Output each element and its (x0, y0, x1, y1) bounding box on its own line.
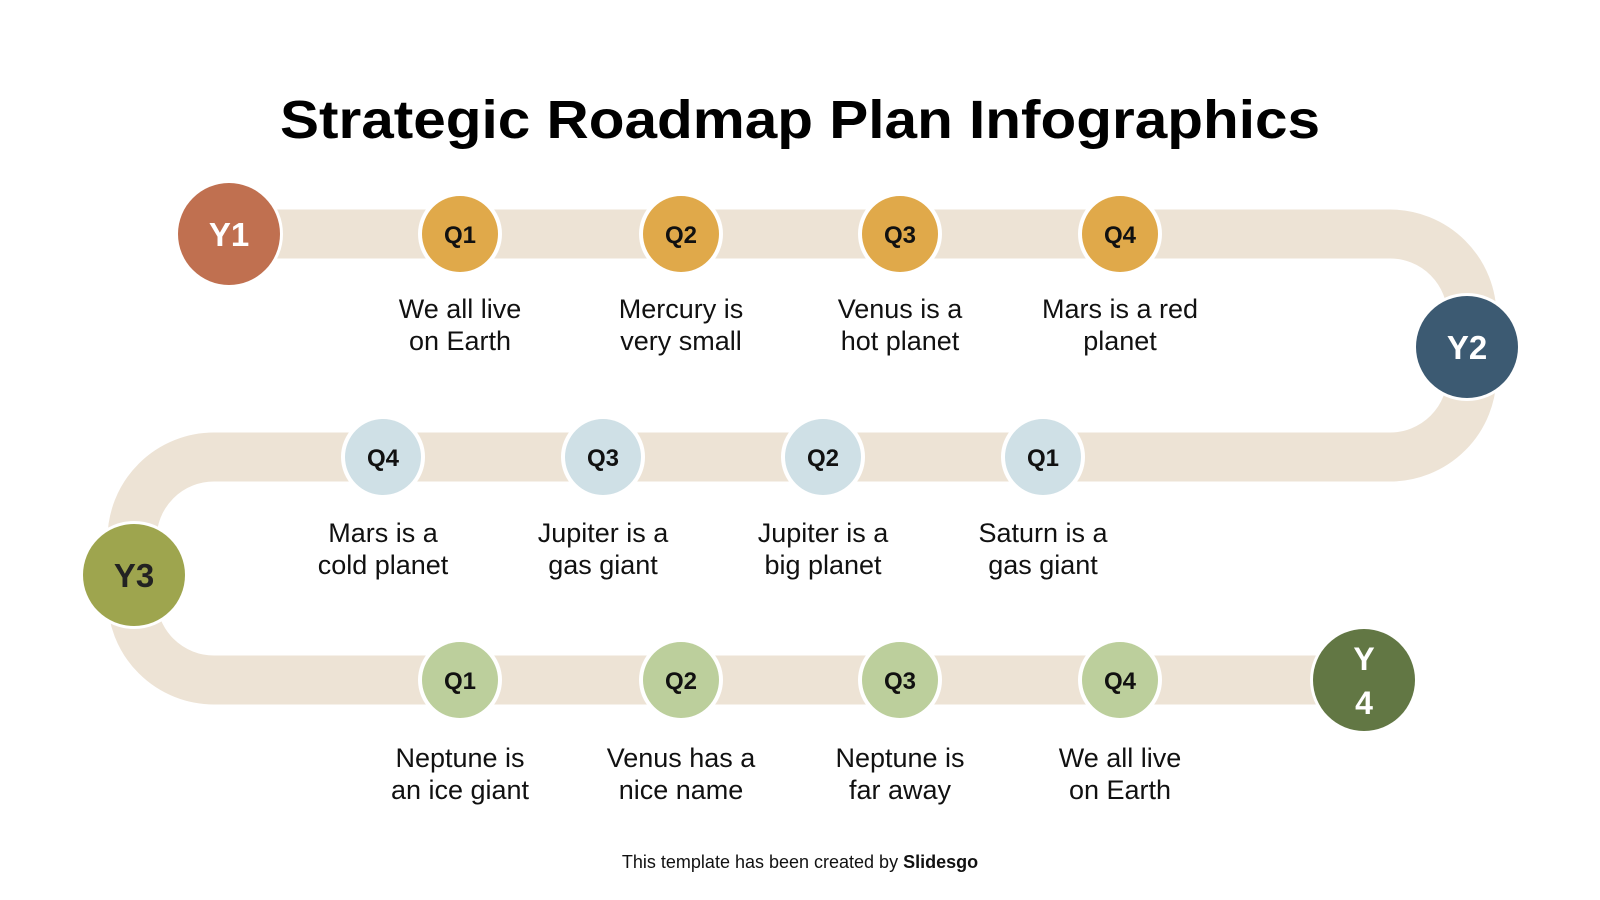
row 2 descriptions: Mars is a (328, 518, 439, 548)
Q4 row2: Q4 (367, 445, 400, 472)
row 1 descriptions: hot planet (841, 326, 960, 356)
row 2 descriptions: Jupiter is a (758, 518, 889, 548)
Q3 row2: Q3 (587, 445, 619, 472)
row 1 descriptions: Venus is a (838, 294, 963, 324)
row 1 quarters (418, 192, 1162, 276)
Q1 row2 (1001, 415, 1085, 499)
milestone: Y1 (175, 180, 283, 288)
milestone: Y1: Y1 (209, 216, 249, 253)
Q2 row1 (639, 192, 723, 276)
row 3 descriptions: nice name (619, 775, 743, 805)
Q1 row2: Q1 (1027, 445, 1059, 472)
row 3 descriptions (391, 743, 1181, 805)
milestone: Y4: Y (1353, 641, 1375, 677)
row 2 descriptions: Jupiter is a (538, 518, 669, 548)
row 3 descriptions: Neptune is (835, 743, 965, 773)
row 1 descriptions: We all live (399, 294, 521, 324)
Q2 row3: Q2 (665, 668, 697, 695)
row 2 descriptions: gas giant (988, 550, 1098, 580)
title: Strategic Roadmap Plan Infographics (280, 90, 1320, 150)
row 3 descriptions: on Earth (1069, 775, 1171, 805)
row 1 descriptions: Mars is a red (1042, 294, 1198, 324)
Q1 row3: Q1 (444, 668, 476, 695)
row 2 descriptions (318, 518, 1109, 580)
Q4 row1: Q4 (1104, 222, 1137, 249)
row 3 quarters (418, 638, 1162, 722)
milestone: Y4 (1310, 626, 1418, 734)
row 2 descriptions: Saturn is a (978, 518, 1109, 548)
Q3 row3 (858, 638, 942, 722)
Q1 row3 (418, 638, 502, 722)
Q2 row2 (781, 415, 865, 499)
row 1 descriptions: on Earth (409, 326, 511, 356)
Q2 row3 (639, 638, 723, 722)
Q4 row3: Q4 (1104, 668, 1137, 695)
row 2 descriptions: cold planet (318, 550, 449, 580)
Q1 row1 (418, 192, 502, 276)
Q3 row1 (858, 192, 942, 276)
row 3 descriptions: We all live (1059, 743, 1181, 773)
row 1 descriptions: planet (1083, 326, 1157, 356)
Q2 row1: Q2 (665, 222, 697, 249)
Q4 row2 (341, 415, 425, 499)
row 2 quarters (341, 415, 1085, 499)
row 2 descriptions: gas giant (548, 550, 658, 580)
Q3 row2 (561, 415, 645, 499)
milestone: Y4: 4 (1355, 685, 1373, 721)
row 3 descriptions: Venus has a (607, 743, 756, 773)
milestone: Y3 (80, 521, 188, 629)
milestone: Y3: Y3 (114, 557, 154, 594)
footer credit: This template has been created by Slidesgo (622, 852, 978, 872)
row 3 descriptions: an ice giant (391, 775, 530, 805)
row 2 descriptions: big planet (764, 550, 882, 580)
row 3 descriptions: far away (849, 775, 952, 805)
milestone: Y2 (1413, 293, 1521, 401)
row 3 descriptions: Neptune is (395, 743, 525, 773)
Q2 row2: Q2 (807, 445, 839, 472)
road track (132, 234, 1472, 680)
row 1 descriptions: very small (620, 326, 742, 356)
Q3 row1: Q3 (884, 222, 916, 249)
Q4 row3 (1078, 638, 1162, 722)
Q4 row1 (1078, 192, 1162, 276)
Q3 row3: Q3 (884, 668, 916, 695)
row 1 descriptions (399, 294, 1198, 356)
Q1 row1: Q1 (444, 222, 476, 249)
milestone: Y2: Y2 (1447, 329, 1487, 366)
row 1 descriptions: Mercury is (619, 294, 743, 324)
